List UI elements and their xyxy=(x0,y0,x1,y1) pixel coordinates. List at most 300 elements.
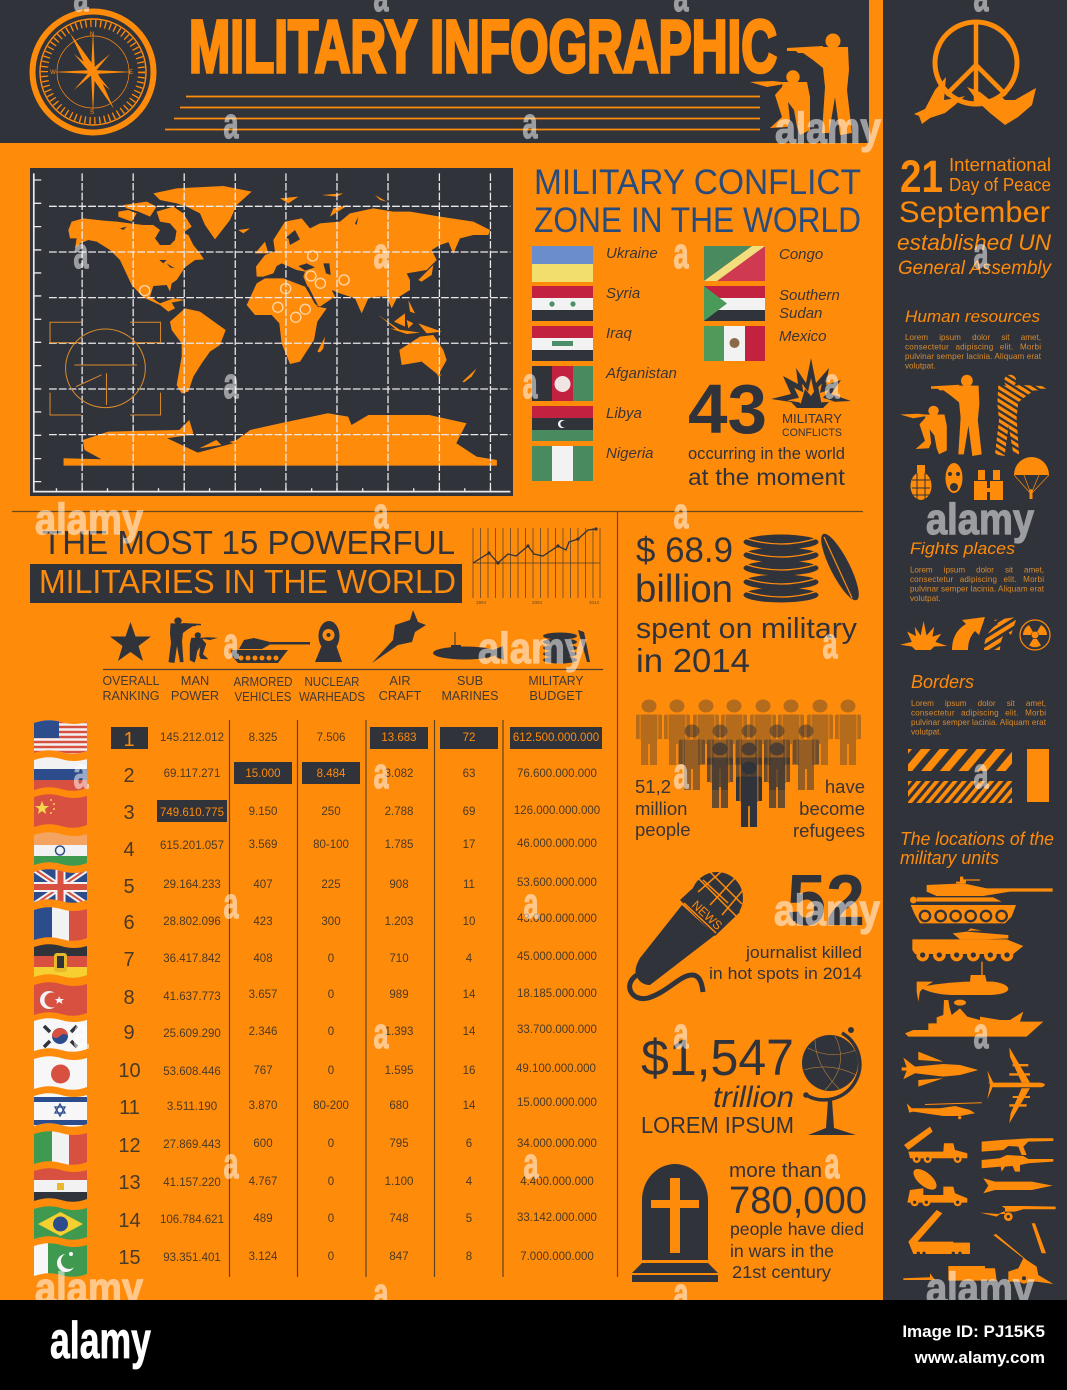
stat: 43 military conflicts xyxy=(688,358,851,490)
row 4: 4 xyxy=(123,839,135,861)
flag: Ukraine xyxy=(532,246,593,282)
stat: 52 journalists: journalist killed xyxy=(745,943,862,962)
icon: submarine xyxy=(917,962,1008,1002)
stat: 1,547 trillion: $1,547 xyxy=(641,1029,794,1086)
alamy watermarks: alamy xyxy=(35,495,143,544)
text: international day of peace: 21 xyxy=(900,151,943,202)
chart: mini trend line: 1994 xyxy=(476,600,487,605)
row 4 xyxy=(123,838,597,861)
row 11: 3.870 xyxy=(249,1100,277,1112)
flag: Germany xyxy=(34,944,87,980)
row 15: 0 xyxy=(328,1251,334,1263)
stat: 43 military conflicts: MILITARY xyxy=(782,411,842,426)
icon: news microphone: NEWS xyxy=(689,898,725,933)
text: borders xyxy=(911,672,1047,736)
alamy watermarks: a xyxy=(374,1009,389,1058)
icon: peace sign with doves xyxy=(914,22,1036,125)
table column headers: OVERALL xyxy=(102,673,160,688)
icon: grenade xyxy=(910,465,932,500)
row 12: 795 xyxy=(389,1138,409,1150)
row 11: 11 xyxy=(119,1097,140,1119)
stat: 780,000 died xyxy=(729,1160,867,1282)
text: international day of peace xyxy=(897,151,1052,279)
icon: tombstone xyxy=(632,1164,718,1282)
row 9: 33.700.000.000 xyxy=(517,1024,597,1036)
flags: ranked countries xyxy=(34,720,87,1279)
row 13 xyxy=(118,1172,594,1194)
text: human resources: consectetur adipiscing elit. Morbi xyxy=(905,342,1041,352)
row 14: 106.784.621 xyxy=(160,1214,224,1226)
icon: jet fighter xyxy=(902,1052,978,1087)
row 6: 300 xyxy=(321,916,341,928)
table highlight cells xyxy=(111,727,602,822)
text: borders: Borders xyxy=(911,672,974,692)
text: refugees: million xyxy=(635,798,687,819)
stat: 780,000 died: more than xyxy=(729,1160,822,1182)
text: borders: Lorem ipsum dolor sit amet, xyxy=(911,699,1046,708)
text: human resources xyxy=(905,307,1042,370)
row 12 xyxy=(118,1135,597,1157)
icon: gas mask xyxy=(946,463,962,493)
table header rule xyxy=(103,668,603,670)
flag: Libya xyxy=(532,406,593,441)
alamy watermarks: a xyxy=(674,749,689,798)
flag: Nigeria xyxy=(532,446,593,481)
alamy watermarks: a xyxy=(74,229,89,278)
row 10 xyxy=(118,1060,596,1082)
alamy watermarks: alamy xyxy=(926,1264,1034,1313)
flag: France xyxy=(34,907,87,943)
row 13: 0 xyxy=(328,1176,334,1188)
conflict markers xyxy=(140,251,349,322)
row 14: 0 xyxy=(328,1213,334,1225)
icon: hatched arrow xyxy=(984,617,1017,650)
text: human resources: volutpat. xyxy=(905,362,936,370)
table column headers: POWER xyxy=(171,688,219,703)
heading: most 15 powerful xyxy=(30,525,462,603)
footer: black alamy strip: alamy xyxy=(50,1312,151,1370)
row 3 xyxy=(123,802,600,824)
icon: warship xyxy=(905,1000,1043,1037)
stat: 43 military conflicts: CONFLICTS xyxy=(782,427,842,439)
row 10: 49.100.000.000 xyxy=(516,1063,596,1075)
flag: Mexico xyxy=(704,326,765,361)
footer: black alamy strip: www.alamy.com xyxy=(914,1348,1045,1367)
row 4: 615.201.057 xyxy=(160,840,224,852)
text: human resources: pulvinar semper lacinia. Aliquam erat xyxy=(905,352,1042,361)
chart: mini trend line: 2014 xyxy=(589,600,600,605)
alamy watermarks: alamy xyxy=(775,104,881,153)
row 10: 53.608.446 xyxy=(163,1066,221,1078)
icon: mortar xyxy=(1032,1223,1046,1253)
table column headers: BUDGET xyxy=(529,688,583,703)
divider lines xyxy=(12,511,863,1277)
alamy watermarks: a xyxy=(674,229,689,278)
table column lines xyxy=(230,720,503,1277)
row 6 xyxy=(123,912,597,934)
stat: 780,000 died: 780,000 xyxy=(729,1180,867,1222)
text: refugees: 51,2 xyxy=(635,776,671,797)
row 2: 2 xyxy=(123,765,135,787)
stat: 43 military conflicts: at the moment xyxy=(688,464,846,490)
icon: parachute xyxy=(1014,457,1049,499)
text: borders: consectetur adipiscing elit. Morbi xyxy=(911,708,1046,718)
scope inset xyxy=(50,322,161,415)
flag: Italy xyxy=(34,1131,87,1167)
row 15 xyxy=(118,1247,594,1269)
text: fights places: consectetur adipiscing elit. Morbi xyxy=(910,575,1044,584)
text: locations of the military units: The locations of the xyxy=(900,829,1054,849)
row 8: 8 xyxy=(123,987,135,1009)
stat: 43 military conflicts: occurring in the world xyxy=(688,445,845,463)
row 15: 847 xyxy=(389,1251,409,1263)
table column headers: ARMORED xyxy=(234,674,292,689)
row 9 xyxy=(123,1022,597,1044)
icon: tank xyxy=(910,877,1053,923)
row 5: 29.164.233 xyxy=(163,879,221,891)
icon: machine gun xyxy=(982,1138,1053,1155)
row 8: 0 xyxy=(328,989,334,1001)
row 8: 14 xyxy=(463,989,476,1001)
alamy watermarks: a xyxy=(674,1009,689,1058)
row 12: 6 xyxy=(466,1138,472,1150)
alamy watermarks: a xyxy=(524,1139,539,1188)
table column headers: SUB xyxy=(457,673,483,688)
icon: radiation xyxy=(1020,620,1050,650)
row 10: 767 xyxy=(253,1065,273,1077)
alamy watermarks: alamy xyxy=(478,624,586,673)
row 5: 225 xyxy=(321,879,341,891)
row 6: 1.203 xyxy=(385,916,413,928)
icon: field gun xyxy=(993,1234,1053,1284)
text: refugees: refugees xyxy=(793,820,865,841)
heading: most 15 powerful: THE MOST 15 POWERFUL xyxy=(42,525,455,562)
row 11: 680 xyxy=(389,1100,409,1112)
row 9: 9 xyxy=(123,1022,135,1044)
alamy watermarks: a xyxy=(674,1269,689,1318)
flag: China xyxy=(34,794,87,830)
row 1: 13.683 xyxy=(381,732,417,744)
table column headers: NUCLEAR xyxy=(304,674,360,689)
icon: star xyxy=(110,622,151,661)
row 14: 489 xyxy=(253,1213,273,1225)
flag: South Korea xyxy=(34,1018,87,1054)
alamy watermarks: a xyxy=(824,1139,840,1188)
table data xyxy=(118,729,600,1269)
flag: Israel xyxy=(34,1093,87,1129)
row 4: 17 xyxy=(463,839,475,851)
flag: Syria xyxy=(532,286,593,321)
alamy watermarks: a xyxy=(374,489,389,538)
row 14: 33.142.000.000 xyxy=(517,1212,597,1224)
flag: Turkey xyxy=(34,982,87,1018)
icons: explosion, arrows, radiation xyxy=(900,617,1050,650)
stat: 68.9 billion spent: $ 68.9 xyxy=(636,531,733,570)
title: MILITARY INFOGRAPHIC xyxy=(189,5,777,88)
row 12: 12 xyxy=(118,1135,141,1157)
icon: coin stack xyxy=(543,630,590,664)
icon: soldiers in header xyxy=(750,34,852,135)
text: international day of peace: September xyxy=(899,196,1050,229)
row 14 xyxy=(118,1210,597,1232)
stat: 68.9 billion spent: spent on military xyxy=(636,613,858,645)
row 10: 1.595 xyxy=(385,1065,413,1077)
table column headers: MAN xyxy=(181,673,209,688)
alamy watermarks: a xyxy=(822,619,838,668)
icon: nuclear warhead xyxy=(315,621,342,662)
flag: Brazil xyxy=(34,1206,87,1242)
footer: black alamy strip xyxy=(0,1300,1067,1390)
alamy watermarks: a xyxy=(522,99,538,148)
row 5 xyxy=(123,876,597,898)
alamy watermarks: a xyxy=(74,749,89,798)
row 3: 250 xyxy=(321,806,341,818)
flag: Pakistan xyxy=(34,1243,87,1279)
row 14: 5 xyxy=(466,1213,472,1225)
row 2: 3.082 xyxy=(385,768,413,780)
footer: black alamy strip: Image ID: PJ15K5 xyxy=(902,1322,1045,1341)
stat: 780,000 died: 21st century xyxy=(732,1262,831,1282)
country labels: Iraq xyxy=(606,325,633,342)
text: fights places: Lorem ipsum dolor sit amet, xyxy=(910,566,1044,574)
icon: soldiers row xyxy=(900,375,1047,456)
icon: missile xyxy=(983,1178,1053,1193)
icon: compass xyxy=(32,12,154,132)
flag: Egypt xyxy=(34,1168,87,1204)
icons: border stripes xyxy=(908,749,1049,803)
row 13: 41.157.220 xyxy=(163,1177,221,1189)
text: fights places xyxy=(910,539,1045,603)
icon: binoculars xyxy=(974,470,1003,500)
icon: compass: E xyxy=(129,70,133,76)
flag: Sudan xyxy=(704,286,765,321)
text: locations of the military units xyxy=(900,829,1054,868)
icon: explosion xyxy=(900,621,947,650)
row 9: 25.609.290 xyxy=(163,1028,221,1040)
row 8: 989 xyxy=(389,989,409,1001)
flag: Iraq xyxy=(532,326,593,361)
row 3: 3 xyxy=(123,802,135,824)
icon: howitzer xyxy=(980,1206,1056,1221)
row 7: 7 xyxy=(123,949,135,971)
row 2: 76.600.000.000 xyxy=(517,768,597,780)
row 3: 126.000.000.000 xyxy=(514,805,600,817)
row 7: 36.417.842 xyxy=(163,953,221,965)
row 3: 749.610.775 xyxy=(160,807,224,819)
row 6: 28.802.096 xyxy=(163,916,221,928)
country labels: Afganistan xyxy=(605,365,677,382)
row 1: 8.325 xyxy=(249,732,277,744)
row 9: 2.346 xyxy=(249,1026,277,1038)
row 14: 748 xyxy=(389,1213,409,1225)
row 1: 7.506 xyxy=(317,732,345,744)
icon: cargo truck with gun xyxy=(903,1266,997,1281)
row 13: 1.100 xyxy=(385,1176,413,1188)
row 4: 80-100 xyxy=(313,839,349,851)
row 15: 8 xyxy=(466,1251,472,1263)
row 3: 9.150 xyxy=(249,806,277,818)
row 2 xyxy=(123,765,597,787)
americas and greenland xyxy=(68,186,252,393)
text: borders: volutpat. xyxy=(911,728,942,736)
icon: compass: N xyxy=(90,32,94,38)
row 12: 0 xyxy=(328,1138,334,1150)
stat: 68.9 billion spent xyxy=(635,530,865,679)
alamy watermarks: a xyxy=(224,359,239,408)
grid lines xyxy=(34,173,510,492)
stat: 68.9 billion spent: billion xyxy=(635,568,733,611)
flag: Russia xyxy=(34,757,87,793)
text: borders: pulvinar semper lacinia. Aliquam erat xyxy=(911,718,1047,727)
row 4: 1.785 xyxy=(385,839,413,851)
country labels: Ukraine xyxy=(606,245,658,262)
row 8: 3.657 xyxy=(249,989,277,1001)
row 14: 14 xyxy=(118,1210,141,1232)
chart: mini trend line xyxy=(473,527,600,605)
alamy watermarks: a xyxy=(524,879,539,928)
row 6: 6 xyxy=(123,912,135,934)
icon: globe xyxy=(802,1027,860,1135)
row 15: 15 xyxy=(118,1247,141,1269)
icon: rocket truck xyxy=(904,1127,967,1163)
text: international day of peace: General Assembly xyxy=(898,258,1052,279)
text: fights places: Fights places xyxy=(910,539,1016,558)
row 1 xyxy=(123,729,599,751)
table column headers xyxy=(102,673,584,704)
row 10: 16 xyxy=(463,1065,475,1077)
alamy watermarks: a xyxy=(374,1269,389,1318)
row 5: 53.600.000.000 xyxy=(517,877,597,889)
text: fights places: pulvinar semper lacinia. Aliquam erat xyxy=(910,584,1045,594)
flag: Japan xyxy=(34,1056,87,1092)
icon: soldiers xyxy=(168,617,218,663)
icon: bomber plane xyxy=(987,1047,1045,1123)
row 5: 5 xyxy=(123,876,135,898)
icon: news microphone xyxy=(630,871,743,999)
stat: 1,547 trillion: LOREM IPSUM xyxy=(641,1112,794,1138)
row 6: 423 xyxy=(253,916,273,928)
text: refugees: have xyxy=(825,776,865,797)
icon: armored vehicle xyxy=(912,928,1023,961)
alamy watermarks: alamy xyxy=(926,495,1034,544)
alamy watermarks: a xyxy=(224,879,239,928)
stat: 43 military conflicts: 43 xyxy=(688,370,767,448)
row 10: 10 xyxy=(118,1060,141,1082)
row 8 xyxy=(123,987,597,1009)
icon: compass: S xyxy=(90,110,94,116)
row 13: 4.767 xyxy=(249,1176,277,1188)
alamy watermarks: a xyxy=(522,359,538,408)
alamy watermarks: a xyxy=(224,619,239,668)
flag: Afghanistan xyxy=(532,366,593,401)
row 13: 4 xyxy=(466,1176,473,1188)
table column headers: RANKING xyxy=(102,688,160,703)
row 7: 4 xyxy=(466,953,473,965)
flags: conflict countries xyxy=(532,246,765,481)
text: international day of peace: established UN xyxy=(897,230,1051,255)
icon: submarine xyxy=(433,632,504,660)
stat: 52 journalists: in hot spots in 2014 xyxy=(709,964,862,983)
icons: grenade, gas mask, binoculars, parachute xyxy=(910,457,1049,500)
icon: helicopter xyxy=(907,1102,982,1119)
row 12: 600 xyxy=(253,1138,273,1150)
row 9: 1.393 xyxy=(385,1026,413,1038)
table column headers: VEHICLES xyxy=(234,689,292,704)
antarctica xyxy=(64,413,497,466)
alamy watermarks: a xyxy=(374,749,389,798)
heading: military conflict zone: MILITARY CONFLICT xyxy=(534,162,861,202)
row 11: 14 xyxy=(463,1100,476,1112)
text: international day of peace: Day of Peace xyxy=(949,175,1051,195)
alamy watermarks: a xyxy=(224,99,239,148)
row 11: 15.000.000.000 xyxy=(517,1097,597,1109)
icon: refugee people xyxy=(636,700,861,827)
alamy watermarks: a xyxy=(674,489,689,538)
header rule lines xyxy=(165,96,760,130)
alamy watermarks: a xyxy=(824,359,840,408)
row 11: 80-200 xyxy=(313,1100,349,1112)
stat: 68.9 billion spent: in 2014 xyxy=(636,642,750,679)
heading: military conflict zone xyxy=(534,162,861,240)
row 1: 145.212.012 xyxy=(160,732,224,744)
table column headers: MILITARY xyxy=(528,673,584,688)
text: human resources: Lorem ipsum dolor sit amet, xyxy=(905,333,1041,342)
icon: assault rifle xyxy=(982,1155,1053,1172)
icon: arrow xyxy=(952,617,985,650)
stat: 52 journalists: 52 xyxy=(787,861,865,941)
row 7: 45.000.000.000 xyxy=(517,951,597,963)
row 9: 14 xyxy=(463,1026,476,1038)
row 13: 13 xyxy=(118,1172,141,1194)
country labels: Mexico xyxy=(779,328,827,345)
row 5: 11 xyxy=(463,879,475,891)
text: refugees xyxy=(635,776,865,841)
table header icons xyxy=(110,610,590,664)
alamy watermarks: a xyxy=(224,1139,239,1188)
table column headers: WARHEADS xyxy=(299,689,365,704)
country labels: Congo xyxy=(779,246,823,263)
stat: 52 journalists xyxy=(709,861,865,983)
row 4: 46.000.000.000 xyxy=(517,838,597,850)
row 6: 10 xyxy=(463,916,475,928)
alamy watermarks: a xyxy=(374,229,389,278)
alamy watermarks: alamy xyxy=(774,886,880,935)
row 15: 3.124 xyxy=(249,1251,278,1263)
country labels: Syria xyxy=(606,285,640,302)
row 2: 15.000 xyxy=(245,768,281,780)
row 5: 908 xyxy=(389,879,409,891)
icons: military units xyxy=(902,877,1056,1284)
country labels: Southern xyxy=(779,287,840,304)
country labels: Libya xyxy=(606,405,642,422)
row 12: 34.000.000.000 xyxy=(517,1138,597,1150)
icon: coins xyxy=(744,530,865,604)
text: refugees: people xyxy=(635,819,691,840)
row 8: 18.185.000.000 xyxy=(517,988,597,1000)
row 7: 408 xyxy=(253,953,273,965)
row 5: 407 xyxy=(253,879,273,891)
panel: world map xyxy=(30,168,513,496)
text: international day of peace: International xyxy=(949,155,1051,175)
row 3: 2.788 xyxy=(385,806,413,818)
row 1: 72 xyxy=(463,732,475,744)
chart: mini trend line: 2004 xyxy=(532,600,543,605)
stat: 780,000 died: people have died xyxy=(730,1219,864,1239)
row 15: 7.000.000.000 xyxy=(520,1251,594,1263)
row 11: 3.511.190 xyxy=(167,1101,217,1113)
icon: radar truck xyxy=(907,1165,967,1206)
row 10: 0 xyxy=(328,1065,334,1077)
